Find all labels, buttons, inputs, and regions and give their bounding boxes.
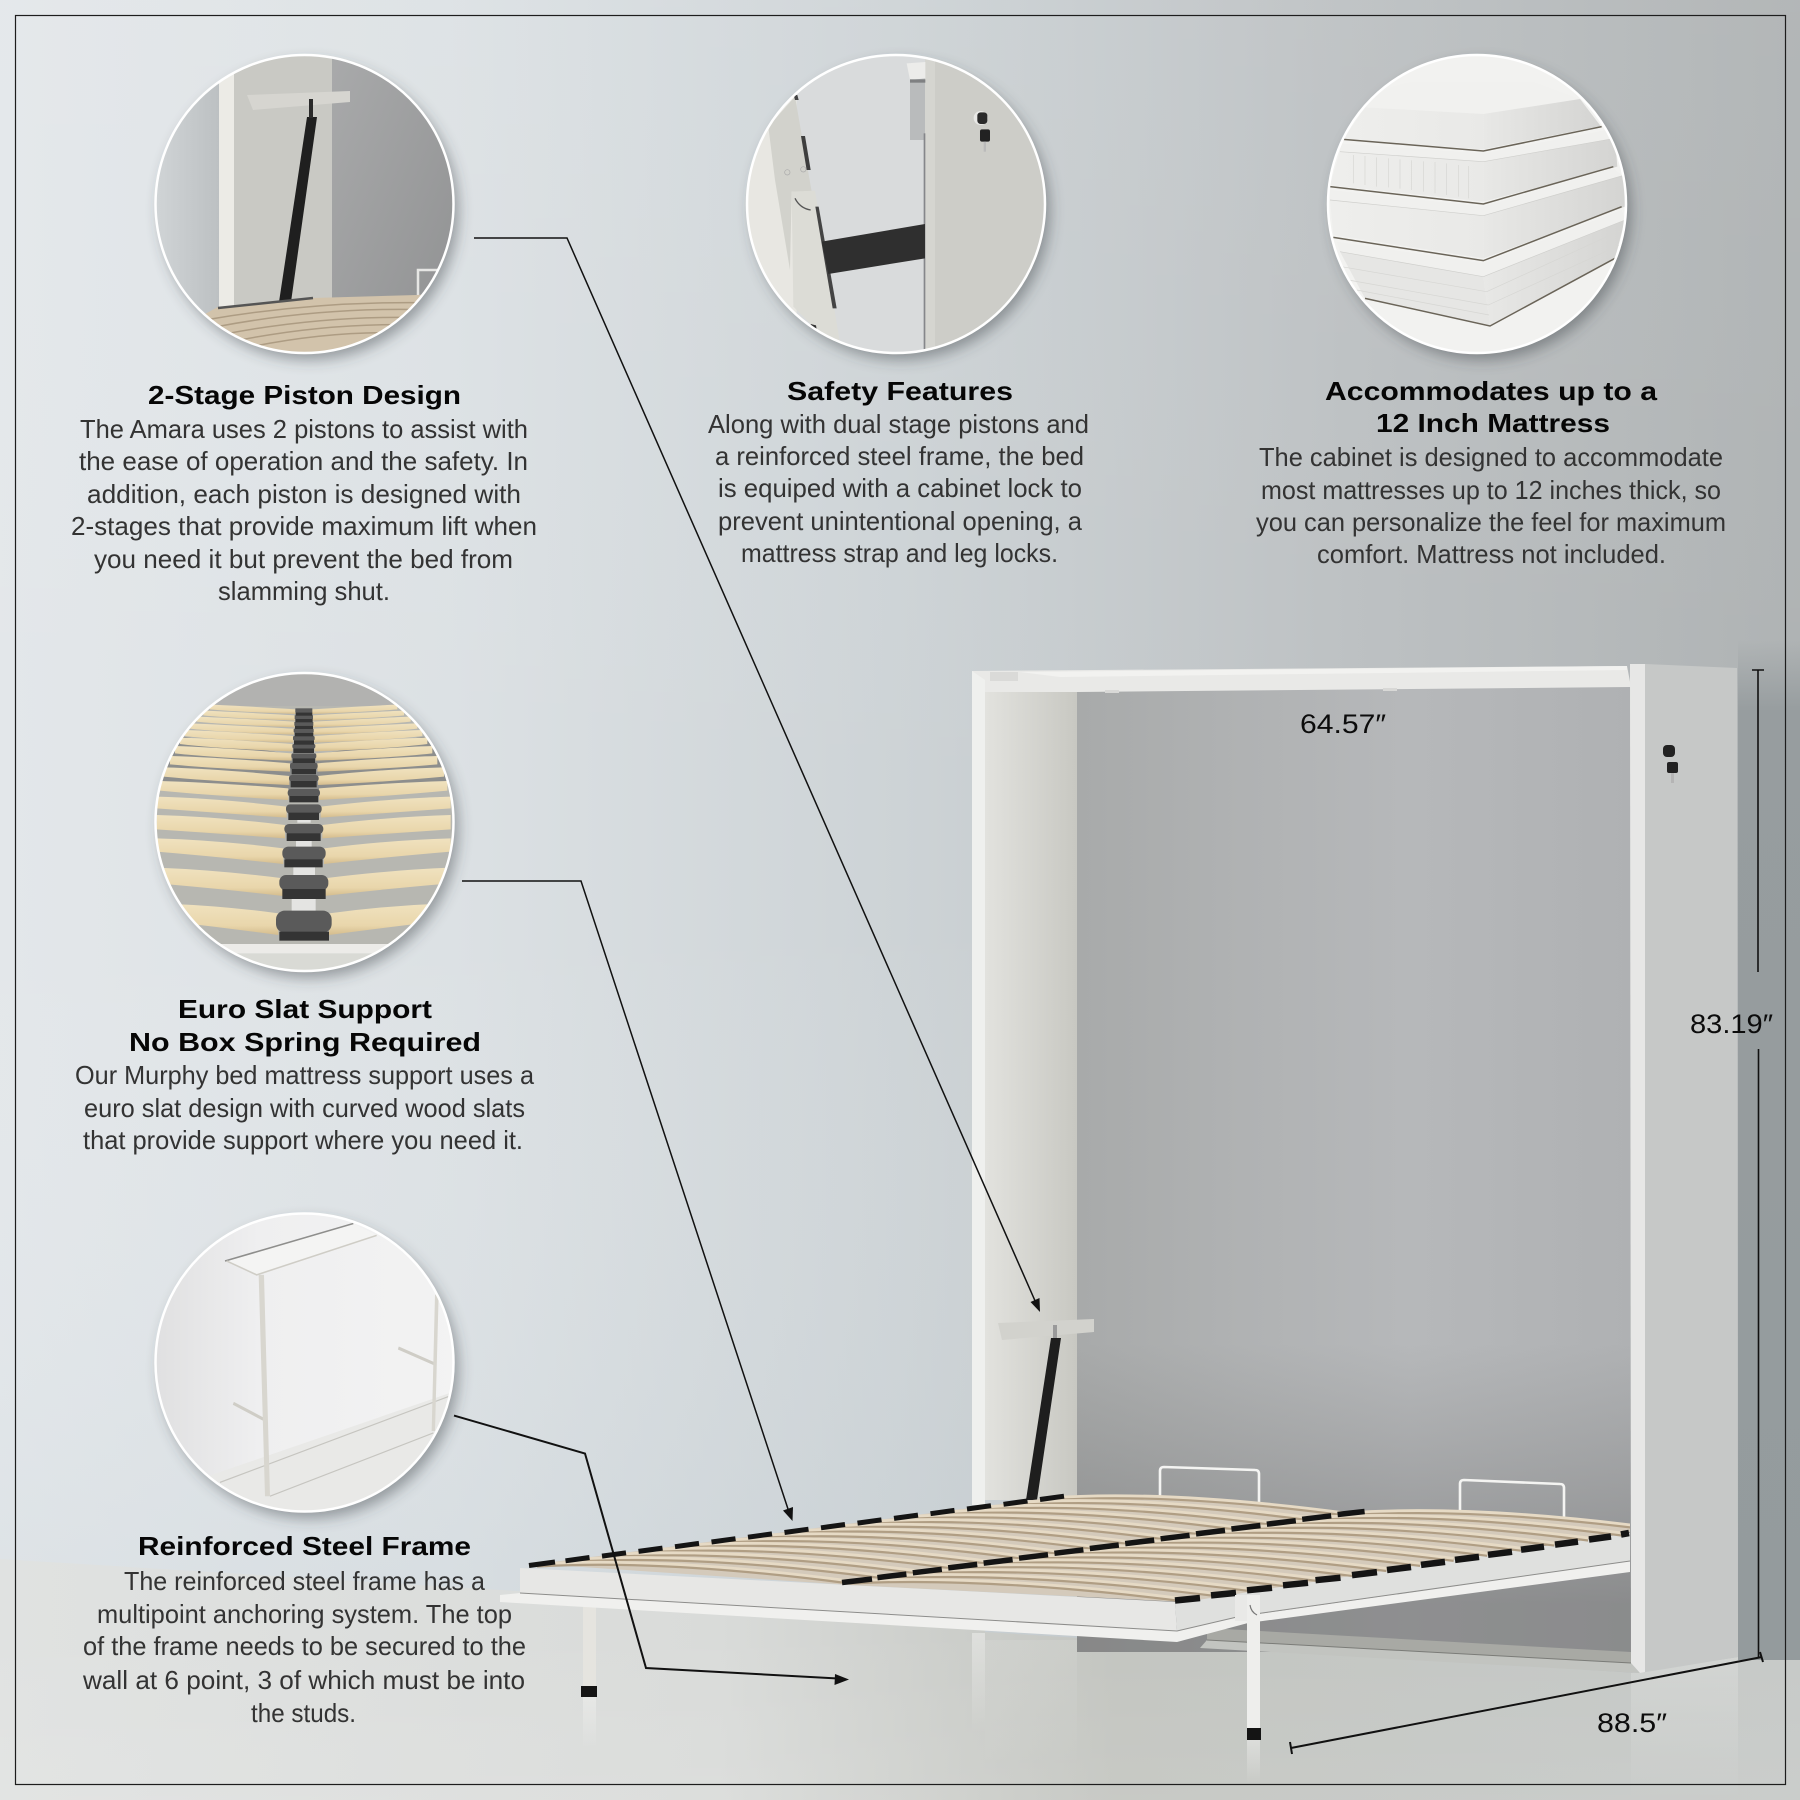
wooden slats (537, 1496, 1655, 1600)
frame right face (1175, 1533, 1630, 1631)
text block: that provide support where you need it. (83, 1125, 523, 1155)
leg: right (1235, 1595, 1261, 1740)
heading: Reinforced Steel Frame (138, 1531, 471, 1561)
text block: addition, each piston is designed with (87, 479, 521, 509)
black slat end caps (529, 1496, 1629, 1600)
arrow: steel frame leader line (454, 1416, 849, 1685)
bed platform (500, 1467, 1655, 1740)
headboard hoop right (1460, 1480, 1564, 1520)
heading: Safety Features (787, 376, 1013, 406)
text block: you need it but prevent the bed from (94, 544, 513, 574)
text block: prevent unintentional opening, a (718, 506, 1083, 536)
text block: Along with dual stage pistons and (708, 409, 1089, 439)
base plate (500, 1561, 1630, 1642)
murphy bed cabinet (972, 640, 1800, 1673)
text block: comfort. Mattress not included. (1317, 539, 1666, 569)
heading: No Box Spring Required (129, 1027, 481, 1057)
text block: euro slat design with curved wood slats (84, 1093, 525, 1123)
text block: the studs. (251, 1698, 356, 1728)
text block: mattress strap and leg locks. (741, 538, 1058, 568)
heading (1325, 376, 1658, 438)
panel: 2-stage piston design (71, 50, 537, 606)
dimension label: depth: 88.5″ (1597, 1708, 1667, 1738)
heading: Accommodates up to a (1325, 376, 1658, 406)
text block: The reinforced steel frame has a (124, 1566, 486, 1596)
icon: piston close-up (150, 50, 462, 360)
leg: left (581, 1606, 597, 1697)
text block: a reinforced steel frame, the bed (715, 441, 1084, 471)
text block: wall at 6 point, 3 of which must be into (82, 1665, 525, 1695)
text block: is equiped with a cabinet lock to (718, 473, 1082, 503)
floor plinth under the bed (1200, 1628, 1640, 1673)
text block: multipoint anchoring system. The top (97, 1599, 512, 1629)
text block (75, 1060, 535, 1155)
icon: stacked mattresses (1320, 50, 1630, 360)
gas piston (1026, 1325, 1061, 1500)
piston bracket (998, 1319, 1094, 1340)
frame front face (520, 1568, 1177, 1631)
text block: Our Murphy bed mattress support uses a (75, 1060, 535, 1090)
left cabinet side (972, 671, 1077, 1505)
text block (82, 1566, 526, 1728)
cabinet lock (1663, 745, 1678, 783)
text block: the ease of operation and the safety. In (79, 446, 528, 476)
dimension: depth line (1290, 1652, 1763, 1754)
text block (1256, 442, 1726, 569)
top cabinet rail (972, 666, 1631, 693)
icon: steel frame close-up (150, 1208, 460, 1520)
floor (0, 1559, 1800, 1800)
text block: 2-stages that provide maximum lift when (71, 511, 537, 541)
heading: 12 Inch Mattress (1376, 408, 1610, 438)
icon: cabinet lock and strap close-up (740, 50, 1050, 360)
panel: accommodates 12 inch mattress (1256, 50, 1726, 569)
panel: safety features (708, 50, 1089, 568)
text block (708, 409, 1089, 568)
icon: euro slats close-up (150, 670, 460, 980)
text block: The Amara uses 2 pistons to assist with (80, 414, 528, 444)
dimension label: width: 64.57″ (1300, 709, 1386, 739)
cabinet shadow on wall (1738, 640, 1800, 1660)
cabinet interior (1077, 687, 1631, 1652)
text block: The cabinet is designed to accommodate (1259, 442, 1723, 472)
text block (71, 414, 537, 606)
text block: you can personalize the feel for maximum (1256, 507, 1726, 537)
text block: of the frame needs to be secured to the (83, 1631, 526, 1661)
dimension: height line (1690, 670, 1773, 1657)
text block: slamming shut. (218, 576, 390, 606)
arrow: piston leader line (474, 238, 1040, 1312)
heading (129, 994, 481, 1057)
headboard hoop left (1160, 1467, 1259, 1504)
panel: reinforced steel frame (82, 1208, 526, 1728)
panel: euro slat support (75, 670, 535, 1155)
heading: Euro Slat Support (178, 994, 432, 1024)
text block: most mattresses up to 12 inches thick, so (1261, 475, 1721, 505)
frame seam lines (520, 1561, 1630, 1631)
slats base (537, 1496, 1655, 1602)
arrow: euro slat leader line (462, 881, 793, 1521)
dimension label: height: 83.19″ (1690, 1009, 1773, 1039)
heading: 2-Stage Piston Design (148, 380, 461, 410)
right cabinet side (1630, 664, 1738, 1673)
